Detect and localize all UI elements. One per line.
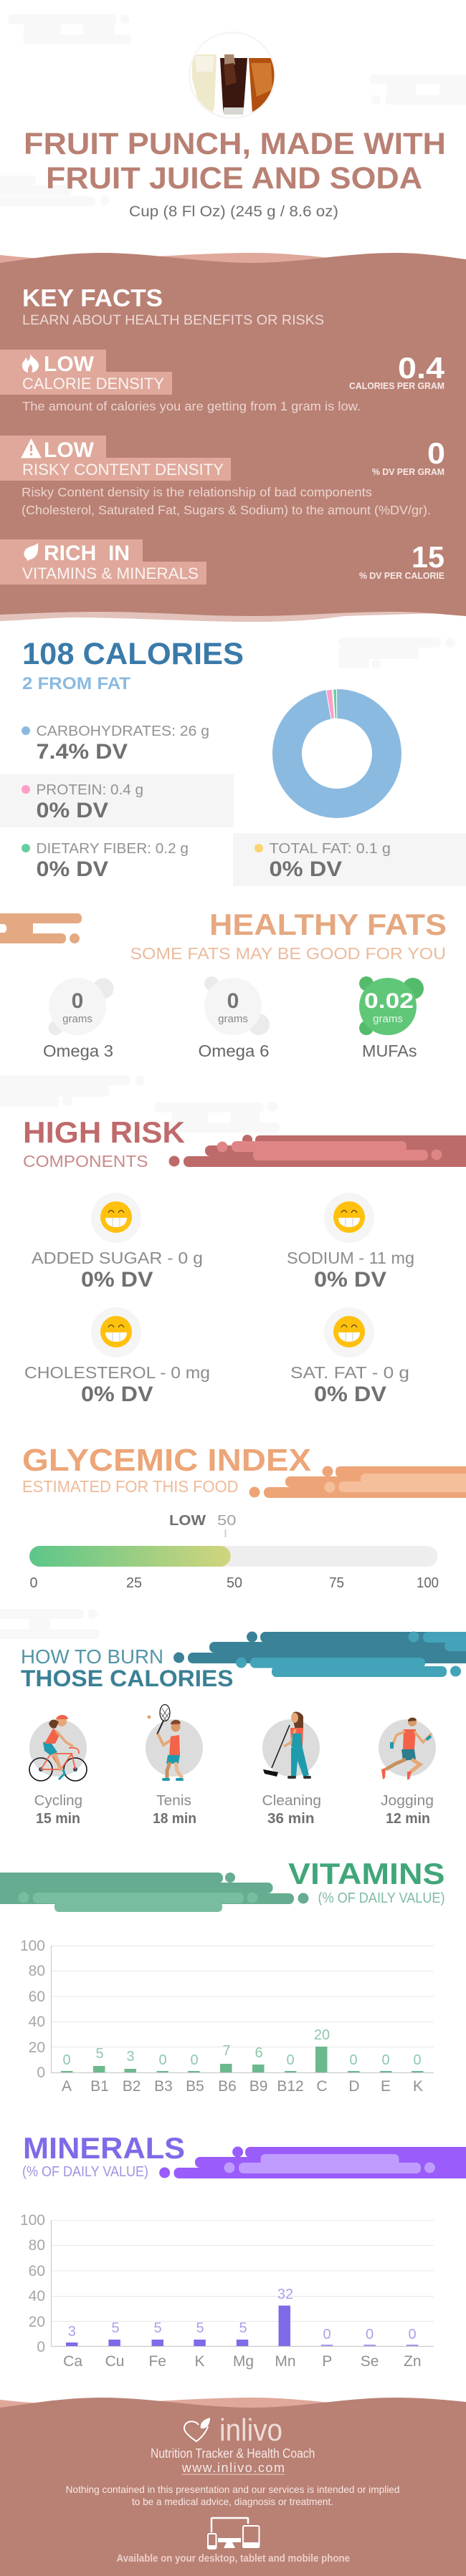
- availability note: Available on your desktop, tablet and mobile phone: [116, 2553, 350, 2565]
- fact: rich in vitamins and minerals: [0, 539, 444, 585]
- icon: tennis player: [148, 1705, 184, 1781]
- high risk heading: [23, 1115, 185, 1171]
- bar chart: vitamins: B2: [123, 2078, 141, 2095]
- fat: omega 6: [198, 976, 270, 1060]
- fact: rich in vitamins and minerals: VITAMINS & MINERALS: [22, 564, 199, 582]
- bar chart: vitamins: B6: [218, 2078, 237, 2095]
- title: [24, 127, 446, 196]
- heading decoration: [0, 1873, 308, 1912]
- bar chart: minerals: 0: [366, 2327, 374, 2342]
- bar chart: vitamins: 0: [413, 2052, 422, 2068]
- glycemic heading: [22, 1443, 311, 1496]
- bar chart: minerals: 5: [239, 2320, 247, 2336]
- fat: omega 3: grams: [62, 1013, 92, 1025]
- bar chart: vitamins: 6: [255, 2045, 263, 2061]
- bar chart: vitamins: B9: [249, 2078, 267, 2095]
- heading decoration: [0, 913, 82, 943]
- bar chart: vitamins: E: [381, 2078, 391, 2095]
- legend: total fat: [233, 833, 466, 886]
- panel: glycemic index: [22, 1443, 466, 1591]
- heading decoration: [169, 1135, 466, 1167]
- bar chart: vitamins: 100: [20, 1938, 45, 1954]
- fat: omega 3: 0: [72, 989, 83, 1013]
- risk item: cholesterol: CHOLESTEROL - 0 mg: [24, 1363, 210, 1382]
- bar chart: minerals: 60: [29, 2263, 45, 2279]
- fat: omega 6: 0: [227, 989, 239, 1013]
- gauge bar: [29, 1546, 437, 1567]
- risk item: cholesterol: 0% DV: [81, 1383, 153, 1406]
- bar chart: vitamins: D: [348, 2078, 360, 2095]
- fact: calorie density: 0.4: [398, 351, 445, 385]
- risk item: sodium: 0% DV: [314, 1268, 386, 1292]
- activity: cycling: Cycling: [34, 1793, 82, 1809]
- fact: risky content density: (Cholesterol, Saturated Fat, Sugars & Sodium) to the amount (%DV/gr).: [22, 503, 431, 517]
- website link: www.inlivo.com: [181, 2461, 285, 2475]
- icon: cyclist: [29, 1715, 87, 1781]
- bar chart: minerals: P: [322, 2353, 332, 2370]
- activity: cycling: [29, 1715, 87, 1827]
- bar chart: vitamins: 40: [29, 2014, 45, 2030]
- burn heading: THOSE CALORIES: [21, 1666, 234, 1691]
- gauge scale: 0: [30, 1575, 37, 1591]
- legend: protein: [0, 774, 234, 827]
- bar chart: minerals: [20, 2212, 434, 2370]
- bar chart: vitamins: 3: [126, 2049, 135, 2065]
- fat: MUFAs: grams: [373, 1013, 403, 1025]
- bar chart: minerals: 32: [277, 2287, 293, 2302]
- fat: MUFAs: [359, 976, 424, 1060]
- bar chart: vitamins: 5: [95, 2046, 104, 2062]
- bar chart: vitamins: K: [413, 2078, 423, 2095]
- legend: total fat: TOTAL FAT: 0.1 g: [270, 841, 391, 857]
- activity: jogging: 12 min: [386, 1811, 430, 1827]
- fat: MUFAs: MUFAs: [362, 1042, 417, 1060]
- legend: dietary fiber: DIETARY FIBER: 0.2 g: [36, 841, 189, 857]
- risk item: saturated fat: SAT. FAT - 0 g: [290, 1363, 409, 1382]
- key facts heading: LEARN ABOUT HEALTH BENEFITS OR RISKS: [22, 313, 324, 328]
- bar chart: vitamins: 0: [349, 2052, 358, 2068]
- vitamins heading: (% OF DAILY VALUE): [318, 1890, 444, 1906]
- disclaimer: [66, 2484, 399, 2507]
- bar chart: vitamins: 0: [158, 2052, 167, 2068]
- burn heading: [21, 1645, 234, 1691]
- activity: tennis: 18 min: [153, 1811, 196, 1827]
- food photo: three glasses: [189, 32, 276, 119]
- legend: carbohydrates: [22, 724, 209, 764]
- bar chart: minerals: 80: [29, 2237, 45, 2254]
- calories heading: [22, 637, 244, 693]
- fat: omega 3: [43, 978, 113, 1060]
- bar chart: minerals: Se: [361, 2353, 379, 2370]
- calories heading: 108 CALORIES: [22, 637, 244, 671]
- minerals heading: (% OF DAILY VALUE): [22, 2164, 148, 2180]
- activity: cleaning: [262, 1712, 321, 1827]
- panel: healthy fats: [0, 908, 447, 1060]
- glycemic heading: GLYCEMIC INDEX: [22, 1443, 311, 1478]
- bar chart: vitamins: 60: [29, 1989, 45, 2005]
- fact: calorie density: The amount of calories you are getting from 1 gram is low.: [22, 399, 361, 413]
- activity: tennis: [146, 1705, 203, 1827]
- disclaimer: to be a medical advice, diagnosis or treatment.: [132, 2496, 333, 2507]
- gauge scale: [30, 1575, 439, 1591]
- bar chart: vitamins: 0: [286, 2052, 295, 2068]
- icon: grinning face: [333, 1201, 365, 1233]
- bar chart: minerals: Cu: [105, 2353, 124, 2370]
- fact: rich in vitamins and minerals: 15: [412, 540, 444, 574]
- bar chart: vitamins: 0: [190, 2052, 199, 2068]
- bar chart: minerals: 5: [153, 2320, 162, 2336]
- legend: total fat: 0% DV: [270, 857, 342, 881]
- key facts heading: KEY FACTS: [22, 285, 163, 312]
- activity: cleaning: 36 min: [267, 1811, 314, 1827]
- activity: jogging: [379, 1718, 436, 1827]
- panel: minerals: [20, 2131, 466, 2370]
- gauge scale: 75: [329, 1575, 344, 1591]
- bar chart: minerals: 0: [323, 2327, 331, 2342]
- fact: risky content density: LOW: [44, 438, 95, 462]
- bar chart: minerals: K: [194, 2353, 205, 2370]
- risk item: sodium: [287, 1193, 414, 1292]
- bar chart: vitamins: 80: [29, 1963, 45, 1979]
- bar chart: minerals: 0: [37, 2339, 45, 2355]
- panel: how to burn those calories: [0, 1609, 466, 1827]
- gauge scale: 50: [227, 1575, 242, 1591]
- bar chart: vitamins: 20: [314, 2027, 330, 2043]
- high risk heading: COMPONENTS: [23, 1152, 148, 1171]
- bar chart: minerals: 3: [68, 2324, 76, 2340]
- bar chart: vitamins: 0: [62, 2052, 71, 2068]
- key facts heading: [22, 285, 324, 328]
- fact: calorie density: LOW: [44, 352, 95, 376]
- fact: risky content density: 0: [427, 436, 445, 470]
- risk item: added sugar: 0% DV: [81, 1268, 153, 1292]
- risk item: saturated fat: [290, 1307, 409, 1406]
- bar chart: minerals: 100: [20, 2212, 45, 2229]
- bar chart: minerals: Zn: [404, 2353, 422, 2370]
- heading decoration: [173, 1632, 466, 1677]
- fact: risky content density: RISKY CONTENT DENSITY: [22, 461, 224, 479]
- donut chart: [287, 689, 387, 804]
- high risk heading: HIGH RISK: [23, 1115, 185, 1149]
- gauge marker label: LOW: [169, 1513, 206, 1529]
- title: FRUIT PUNCH, MADE WITH: [24, 127, 446, 161]
- vitamins heading: VITAMINS: [288, 1857, 444, 1890]
- bar chart: minerals: 0: [408, 2327, 417, 2342]
- icon: warning triangle: [22, 439, 41, 458]
- fact: rich in vitamins and minerals: RICH IN: [44, 542, 130, 565]
- legend: protein: 0% DV: [36, 799, 108, 822]
- bar chart: vitamins: 0: [381, 2052, 390, 2068]
- activity: cleaning: Cleaning: [262, 1793, 321, 1809]
- bar chart: minerals: Ca: [63, 2353, 82, 2370]
- tagline: Nutrition Tracker & Health Coach: [151, 2446, 315, 2461]
- fact: calorie density: [0, 350, 445, 413]
- legend: dietary fiber: [22, 841, 189, 881]
- disclaimer: Nothing contained in this presentation and our services is intended or implied: [66, 2484, 399, 2495]
- bar chart: minerals: 5: [196, 2320, 204, 2336]
- bar chart: vitamins: B5: [186, 2078, 204, 2095]
- bar chart: vitamins: B12: [277, 2078, 304, 2095]
- icon: grinning face: [333, 1316, 365, 1347]
- fat: omega 6: grams: [218, 1013, 248, 1025]
- fact: risky content density: % DV PER GRAM: [372, 466, 444, 477]
- heading decoration: [159, 2146, 466, 2178]
- fact: calorie density: CALORIE DENSITY: [22, 375, 164, 393]
- bar chart: vitamins: C: [316, 2078, 328, 2095]
- panel: footer: [0, 2398, 466, 2576]
- serving size: Cup (8 Fl Oz) (245 g / 8.6 oz): [129, 203, 338, 220]
- bar chart: vitamins: B3: [154, 2078, 173, 2095]
- activity: tennis: Tenis: [156, 1793, 191, 1809]
- healthy fats heading: SOME FATS MAY BE GOOD FOR YOU: [130, 944, 446, 963]
- logo: [184, 2413, 282, 2448]
- risk item: cholesterol: [24, 1307, 210, 1406]
- risk item: saturated fat: 0% DV: [314, 1383, 386, 1406]
- healthy fats heading: [130, 908, 447, 963]
- fact: risky content density: [0, 436, 445, 517]
- icon: leaf: [24, 543, 38, 561]
- bar chart: minerals: Mg: [233, 2353, 254, 2370]
- fat: omega 3: Omega 3: [43, 1042, 113, 1060]
- bar chart: vitamins: [20, 1938, 434, 2095]
- bar chart: minerals: 5: [111, 2320, 120, 2336]
- bar chart: vitamins: 7: [222, 2043, 231, 2059]
- gauge marker label: [169, 1513, 237, 1537]
- icon: jogger: [381, 1718, 432, 1779]
- logo: inlivo: [219, 2413, 282, 2448]
- bar chart: minerals: 40: [29, 2288, 45, 2305]
- background cloud decorations: [0, 14, 466, 206]
- gauge scale: 25: [126, 1575, 142, 1591]
- risk item: added sugar: [32, 1193, 203, 1292]
- legend: protein: PROTEIN: 0.4 g: [36, 782, 143, 798]
- panel: high risk components: [0, 1075, 466, 1406]
- legend: dietary fiber: 0% DV: [36, 857, 108, 881]
- gauge marker label: 50: [217, 1513, 237, 1529]
- risk item: sodium: SODIUM - 11 mg: [287, 1249, 414, 1267]
- fat: MUFAs: 0.02: [364, 989, 414, 1013]
- icon: heart with leaf: [184, 2418, 210, 2441]
- burn heading: HOW TO BURN: [21, 1645, 163, 1668]
- panel: calories: [0, 637, 466, 886]
- icon: desktop, tablet and phone: [207, 2518, 260, 2549]
- fact: risky content density: Risky Content density is the relationship of bad components: [22, 485, 372, 499]
- fat: omega 6: Omega 6: [198, 1042, 270, 1060]
- icon: flame: [22, 353, 39, 373]
- activity: jogging: Jogging: [381, 1793, 434, 1809]
- bar chart: minerals: Mn: [275, 2353, 296, 2370]
- fact: rich in vitamins and minerals: % DV PER CALORIE: [359, 570, 444, 581]
- bar chart: vitamins: B1: [90, 2078, 109, 2095]
- panel: key facts: [0, 253, 466, 622]
- bar chart: vitamins: 20: [29, 2039, 45, 2056]
- bar chart: vitamins: 0: [37, 2065, 45, 2081]
- bar chart: minerals: 20: [29, 2314, 45, 2330]
- panel: vitamins: [0, 1857, 444, 2095]
- healthy fats heading: HEALTHY FATS: [209, 908, 447, 941]
- activity: cycling: 15 min: [36, 1811, 80, 1827]
- glycemic heading: ESTIMATED FOR THIS FOOD: [22, 1477, 238, 1496]
- bar chart: minerals: Fe: [148, 2353, 166, 2370]
- minerals heading: MINERALS: [23, 2131, 185, 2165]
- title: FRUIT JUICE AND SODA: [46, 161, 422, 196]
- calories heading: 2 FROM FAT: [22, 674, 130, 693]
- fact: calorie density: CALORIES PER GRAM: [349, 380, 444, 391]
- heading decoration: [249, 1466, 466, 1498]
- icon: grinning face: [100, 1201, 132, 1233]
- legend: carbohydrates: CARBOHYDRATES: 26 g: [36, 724, 209, 739]
- icon: grinning face: [100, 1316, 132, 1347]
- gauge scale: 100: [417, 1575, 439, 1591]
- legend: carbohydrates: 7.4% DV: [36, 740, 128, 764]
- panel: header: [26, 32, 444, 219]
- icon: person sweeping: [263, 1712, 311, 1779]
- minerals heading: [22, 2131, 185, 2180]
- bar chart: vitamins: A: [62, 2078, 72, 2095]
- vitamins heading: [288, 1857, 444, 1906]
- risk item: added sugar: ADDED SUGAR - 0 g: [32, 1249, 203, 1267]
